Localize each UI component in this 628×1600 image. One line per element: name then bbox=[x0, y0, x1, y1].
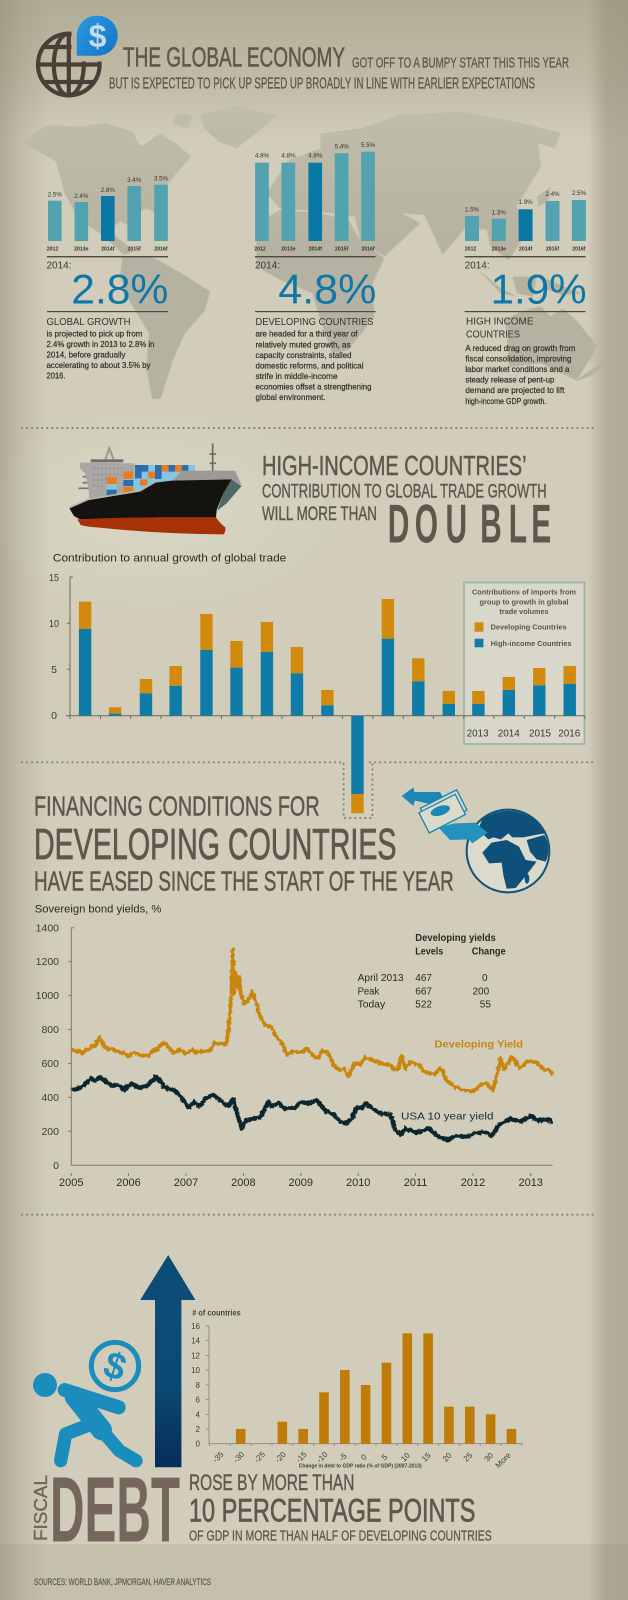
panel: global growth: GLOBAL GROWTH bbox=[46, 316, 130, 328]
bar chart: high income countries: 1.3% bbox=[492, 209, 506, 216]
big number: 2.8%: 2.8% bbox=[71, 265, 168, 312]
world map background bbox=[22, 106, 607, 399]
line chart: sovereign bond yields: Developing Yield bbox=[434, 1038, 523, 1050]
legend box: 2015 bbox=[529, 728, 551, 740]
histogram: change in debt to gdp ratio: -5 bbox=[337, 1451, 349, 1463]
histogram: change in debt to gdp ratio: -15 bbox=[294, 1450, 309, 1465]
line chart: sovereign bond yields: 1200 bbox=[36, 956, 59, 968]
text block: developing countries bbox=[256, 329, 372, 402]
line chart: sovereign bond yields: 2010 bbox=[346, 1177, 370, 1189]
histogram: change in debt to gdp ratio: 10 bbox=[191, 1366, 201, 1375]
panel: high income countries: COUNTRIES bbox=[466, 329, 520, 341]
text block: global growth: is projected to pick up from bbox=[46, 329, 142, 339]
stacked bar chart: contribution to global trade: 15 bbox=[49, 572, 59, 584]
legend box: trade volumes bbox=[500, 607, 548, 616]
heading: high-income countries: HIGH-INCOME COUNTRIES’ bbox=[262, 450, 527, 481]
bar chart: high income countries: 2013e bbox=[492, 247, 506, 253]
line chart: sovereign bond yields bbox=[36, 922, 553, 1189]
bar chart: high income countries: 1.9% bbox=[519, 199, 533, 206]
bar chart: global growth: 2.8% bbox=[101, 187, 115, 194]
bar chart: developing countries: 2014f bbox=[309, 247, 322, 253]
heading: financing conditions bbox=[34, 791, 454, 897]
line chart: sovereign bond yields: 200 bbox=[41, 1126, 59, 1138]
bar chart: high income countries: 2012 bbox=[465, 247, 476, 253]
heading: fiscal debt: DEBT bbox=[50, 1458, 180, 1562]
histogram: change in debt to gdp ratio: -25 bbox=[252, 1450, 267, 1465]
line chart: sovereign bond yields: 2012 bbox=[461, 1177, 485, 1189]
chart title: sovereign bond yields: Sovereign bond yields, % bbox=[35, 904, 162, 916]
big number: 1.9%: 1.9% bbox=[491, 265, 587, 312]
line chart: sovereign bond yields: 2005 bbox=[59, 1177, 84, 1189]
line: usa 10 year yield bbox=[71, 1077, 553, 1140]
text block: developing countries: relatively muted growth, as bbox=[256, 339, 350, 349]
heading: financing conditions: FINANCING CONDITIONS FOR bbox=[34, 791, 320, 822]
text block: high income countries bbox=[465, 343, 575, 406]
heading: financing conditions: DEVELOPING COUNTRIES bbox=[34, 820, 396, 869]
icon: globe with dollar bubble: $ bbox=[89, 18, 107, 54]
bar chart: developing countries bbox=[254, 142, 376, 253]
bar chart: developing countries: 4.8% bbox=[308, 153, 323, 160]
bar chart: developing countries: 2012 bbox=[254, 247, 266, 253]
legend box: 2014 bbox=[498, 728, 520, 740]
line: developing yield bbox=[71, 949, 553, 1092]
histogram: change in debt to gdp ratio: -30 bbox=[232, 1450, 247, 1465]
text block: developing countries: economies offset a strengthening bbox=[256, 381, 372, 391]
table: developing yields: 467 bbox=[415, 973, 432, 984]
panel: developing countries bbox=[254, 142, 376, 402]
text block: developing countries: capacity constraints, stalled bbox=[256, 350, 352, 360]
bar chart: global growth: 2.4% bbox=[74, 193, 89, 200]
histogram: change in debt to gdp ratio: 10 bbox=[399, 1451, 412, 1464]
text block: high income countries: steady release of pent-up bbox=[465, 375, 555, 385]
heading: fiscal debt bbox=[31, 1458, 492, 1562]
icon: globe with dollar bubble bbox=[37, 16, 118, 96]
stacked bar chart: contribution to global trade: 5 bbox=[51, 664, 57, 676]
histogram: change in debt to gdp ratio: 16 bbox=[191, 1322, 201, 1331]
bar chart: developing countries: 2016f bbox=[361, 247, 375, 253]
panel: developing countries: 2014: bbox=[255, 259, 280, 271]
legend box: High-income Countries bbox=[491, 639, 572, 648]
line chart: sovereign bond yields: 2006 bbox=[116, 1177, 141, 1189]
text block: high income countries: demand are projected to lift bbox=[465, 385, 565, 395]
histogram: change in debt to gdp ratio: 15 bbox=[420, 1451, 433, 1464]
table: developing yields bbox=[358, 933, 506, 1011]
histogram: change in debt to gdp ratio: # of countries bbox=[192, 1309, 241, 1318]
panel: developing countries: DEVELOPING COUNTRIES bbox=[256, 316, 374, 328]
table: developing yields: Today bbox=[358, 1000, 385, 1011]
line chart: sovereign bond yields: 2007 bbox=[174, 1177, 198, 1189]
histogram: change in debt to gdp ratio: -20 bbox=[273, 1450, 288, 1465]
title: the global economy: THE GLOBAL ECONOMY bbox=[123, 42, 345, 73]
text block: developing countries: domestic reforms, and political bbox=[256, 360, 364, 370]
bar chart: global growth: 2015f bbox=[128, 247, 141, 253]
text block: global growth: 2.4% growth in 2013 to 2.8% in bbox=[46, 339, 155, 349]
legend box: Contributions of imports from bbox=[472, 588, 576, 597]
bar chart: developing countries: 4.8% bbox=[255, 153, 270, 160]
legend box bbox=[464, 582, 584, 744]
text block: global growth: 2014, before gradually bbox=[46, 350, 126, 360]
bar chart: high income countries: 2015f bbox=[546, 247, 559, 253]
table: developing yields: 55 bbox=[480, 1000, 491, 1011]
stacked bar chart: contribution to global trade bbox=[49, 572, 585, 813]
big number: 4.8%: 4.8% bbox=[278, 265, 376, 312]
legend box: group to growth in global bbox=[480, 597, 568, 606]
bar chart: high income countries: 2.5% bbox=[572, 190, 586, 197]
icon: upward arrow bbox=[140, 1255, 195, 1467]
text block: developing countries: global environment. bbox=[256, 392, 326, 402]
text block: developing countries: strife in middle-income bbox=[256, 371, 338, 381]
table: developing yields: Peak bbox=[358, 986, 380, 997]
bar chart: developing countries: 5.5% bbox=[361, 142, 376, 149]
text block: developing countries: are headed for a third year of bbox=[256, 329, 358, 339]
legend box: 2013 bbox=[467, 728, 489, 740]
line chart: sovereign bond yields: 2009 bbox=[289, 1177, 313, 1189]
heading: fiscal debt: ROSE BY MORE THAN bbox=[189, 1470, 354, 1495]
histogram: change in debt to gdp ratio: 4 bbox=[196, 1410, 201, 1419]
sources: SOURCES: WORLD BANK, JPMORGAN, HAVER ANALYTICS bbox=[34, 1577, 211, 1587]
bar chart: high income countries: 1.5% bbox=[465, 207, 480, 214]
histogram: change in debt to gdp ratio: Change in debt to GDP ratio (% of GDP) (2007-2013) bbox=[299, 1464, 422, 1470]
text block: high income countries: high-income GDP growth. bbox=[465, 396, 546, 406]
histogram: change in debt to gdp ratio: 20 bbox=[441, 1451, 454, 1464]
bar chart: developing countries: 4.8% bbox=[281, 153, 296, 160]
line chart: sovereign bond yields: USA 10 year yield bbox=[401, 1110, 494, 1122]
bar chart: global growth: 2016f bbox=[154, 247, 168, 253]
histogram: change in debt to gdp ratio bbox=[191, 1309, 522, 1470]
text block: high income countries: labor market conditions and a bbox=[465, 364, 570, 374]
panel: global growth: 2014: bbox=[46, 259, 72, 271]
table: developing yields: April 2013 bbox=[358, 973, 404, 984]
stacked bar chart: contribution to global trade: 0 bbox=[51, 710, 57, 722]
line chart: sovereign bond yields: 1000 bbox=[36, 990, 59, 1002]
icon: person pushing dollar coin bbox=[33, 1342, 139, 1461]
table: developing yields: Developing yields bbox=[415, 933, 496, 944]
bar chart: global growth bbox=[47, 176, 169, 253]
table: developing yields: Change bbox=[472, 946, 506, 957]
table: developing yields: 522 bbox=[415, 1000, 432, 1011]
table: developing yields: 0 bbox=[482, 973, 488, 984]
bar chart: developing countries: 2015f bbox=[335, 247, 349, 253]
heading: high-income countries: DOUBLE bbox=[388, 494, 551, 555]
chart title: contribution to annual growth: Contribution to annual growth of global trade bbox=[53, 553, 286, 565]
heading: fiscal debt: 10 PERCENTAGE POINTS bbox=[189, 1492, 475, 1529]
text block: global growth: 2016. bbox=[46, 371, 66, 381]
table: developing yields: Levels bbox=[415, 946, 444, 957]
panel: global growth bbox=[46, 176, 169, 381]
bar chart: high income countries: 2016f bbox=[572, 247, 586, 253]
bar chart: global growth: 2.5% bbox=[48, 192, 62, 199]
histogram: change in debt to gdp ratio: 8 bbox=[196, 1381, 201, 1390]
line chart: sovereign bond yields: 2008 bbox=[231, 1177, 256, 1189]
icon: person pushing dollar coin: $ bbox=[99, 1342, 132, 1389]
text block: high income countries: fiscal consolidation, improving bbox=[465, 354, 572, 364]
line chart: sovereign bond yields: 2013 bbox=[518, 1177, 543, 1189]
heading: fiscal debt: FISCAL bbox=[31, 1475, 51, 1541]
bar chart: developing countries: 5.4% bbox=[335, 143, 349, 150]
line chart: sovereign bond yields: 0 bbox=[53, 1160, 59, 1172]
heading: high-income countries: WILL MORE THAN bbox=[262, 503, 377, 525]
panel: high income countries: 2014: bbox=[465, 259, 490, 271]
bar chart: global growth: 2014f bbox=[101, 247, 115, 253]
icon: container ship bbox=[69, 443, 242, 534]
heading: fiscal debt: OF GDP IN MORE THAN HALF OF DEVELOPING COUNTRIES bbox=[189, 1528, 492, 1545]
histogram: change in debt to gdp ratio: 0 bbox=[359, 1452, 369, 1462]
line chart: sovereign bond yields: 400 bbox=[41, 1092, 59, 1104]
histogram: change in debt to gdp ratio: 0 bbox=[196, 1440, 201, 1449]
histogram: change in debt to gdp ratio: 2 bbox=[196, 1425, 201, 1434]
histogram: change in debt to gdp ratio: 6 bbox=[196, 1396, 201, 1405]
bar chart: global growth: 2013e bbox=[74, 247, 89, 253]
heading: high-income countries bbox=[262, 450, 551, 555]
bar chart: high income countries: 2014f bbox=[519, 247, 532, 253]
panel: high income countries bbox=[465, 190, 587, 406]
histogram: change in debt to gdp ratio: 5 bbox=[380, 1452, 390, 1462]
line chart: sovereign bond yields: 800 bbox=[41, 1024, 59, 1036]
text block: high income countries: A reduced drag on growth from bbox=[465, 343, 575, 353]
legend box: 2016 bbox=[558, 728, 580, 740]
text block: global growth bbox=[46, 329, 155, 381]
bar chart: developing countries: 2013e bbox=[281, 247, 296, 253]
bar chart: global growth: 3.4% bbox=[127, 177, 142, 184]
bar chart: global growth: 2012 bbox=[47, 247, 58, 253]
histogram: change in debt to gdp ratio: 30 bbox=[483, 1451, 496, 1464]
bar chart: high income countries bbox=[465, 190, 586, 253]
histogram: change in debt to gdp ratio: More bbox=[494, 1450, 513, 1470]
histogram: change in debt to gdp ratio: 12 bbox=[191, 1351, 201, 1360]
histogram: change in debt to gdp ratio: -10 bbox=[315, 1450, 330, 1465]
histogram: change in debt to gdp ratio: 25 bbox=[462, 1451, 475, 1464]
panel: high income countries: HIGH INCOME bbox=[466, 316, 534, 328]
icon: money flowing to globe bbox=[402, 787, 549, 892]
table: developing yields: 200 bbox=[472, 986, 490, 997]
text block: global growth: accelerating to about 3.5% by bbox=[46, 360, 151, 370]
line chart: sovereign bond yields: 600 bbox=[41, 1058, 59, 1070]
title: the global economy bbox=[109, 42, 569, 92]
histogram: change in debt to gdp ratio: 14 bbox=[191, 1337, 201, 1346]
histogram: change in debt to gdp ratio: -35 bbox=[211, 1450, 226, 1465]
legend box: Developing Countries bbox=[491, 623, 567, 632]
bar chart: global growth: 3.5% bbox=[154, 176, 169, 183]
stacked bar chart: contribution to global trade: 10 bbox=[49, 618, 59, 630]
line chart: sovereign bond yields: 1400 bbox=[36, 922, 59, 934]
bar chart: high income countries: 2.4% bbox=[545, 191, 560, 198]
line chart: sovereign bond yields: 2011 bbox=[404, 1177, 427, 1189]
table: developing yields: 667 bbox=[415, 986, 432, 997]
